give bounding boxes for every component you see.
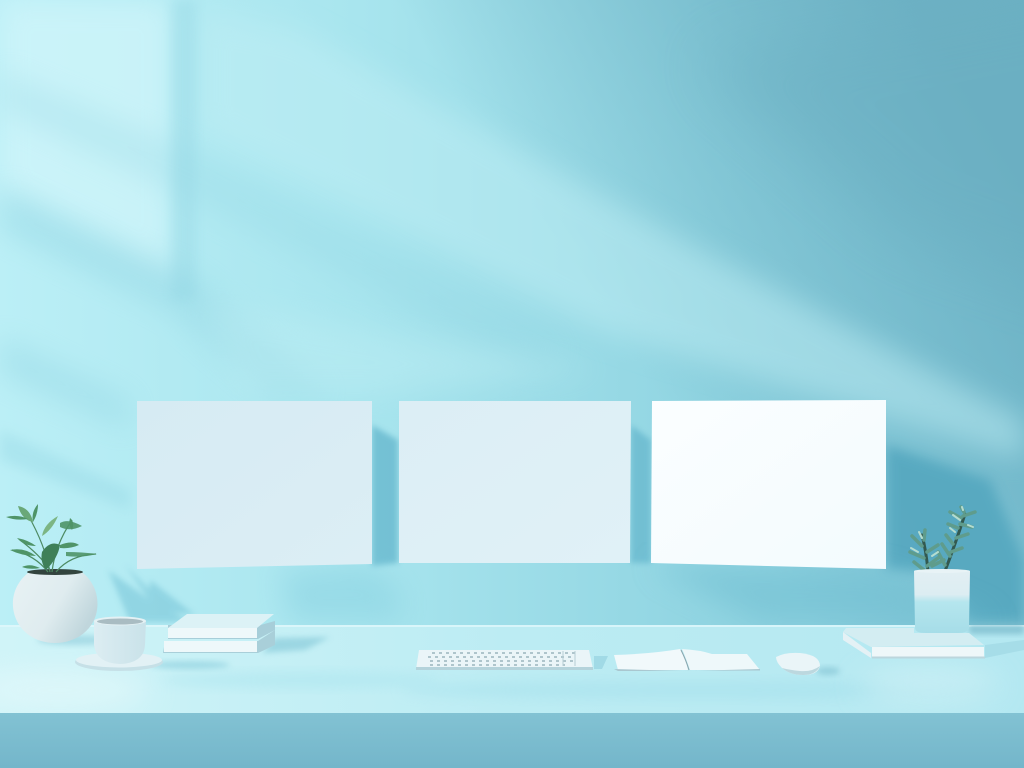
- pot: [914, 571, 970, 633]
- panel: left: [137, 401, 372, 569]
- plant stems and leaves: [6, 504, 97, 572]
- icon: round white pot: [13, 571, 97, 643]
- cup: [94, 621, 146, 664]
- saucer: [75, 653, 163, 671]
- desk shadow: [262, 637, 330, 653]
- plant shadow on wall: [108, 565, 195, 622]
- window light and shadow pattern on wall: [0, 0, 1024, 510]
- shadow: [150, 661, 230, 669]
- icon: keyboard: [416, 650, 608, 670]
- pot shadow: [37, 635, 113, 645]
- icon: mouse: [776, 653, 840, 675]
- panel: center: [399, 401, 631, 563]
- desk shadow: [968, 625, 1024, 634]
- desk highlights: [0, 625, 1024, 712]
- icon: closed book: [843, 628, 1024, 658]
- plant: right potted plant: [910, 507, 1024, 634]
- panel: right: [651, 400, 886, 569]
- plant: left potted plant: [6, 504, 113, 645]
- desk front edge: [0, 713, 1024, 768]
- icon: stack of books: [163, 614, 330, 653]
- foliage: [910, 507, 975, 571]
- soil: [27, 569, 83, 575]
- desk top surface: [0, 625, 1024, 713]
- icon: open notebook: [614, 649, 760, 671]
- panel shadows on wall: [280, 425, 1024, 622]
- icon: cup and saucer: [75, 616, 230, 671]
